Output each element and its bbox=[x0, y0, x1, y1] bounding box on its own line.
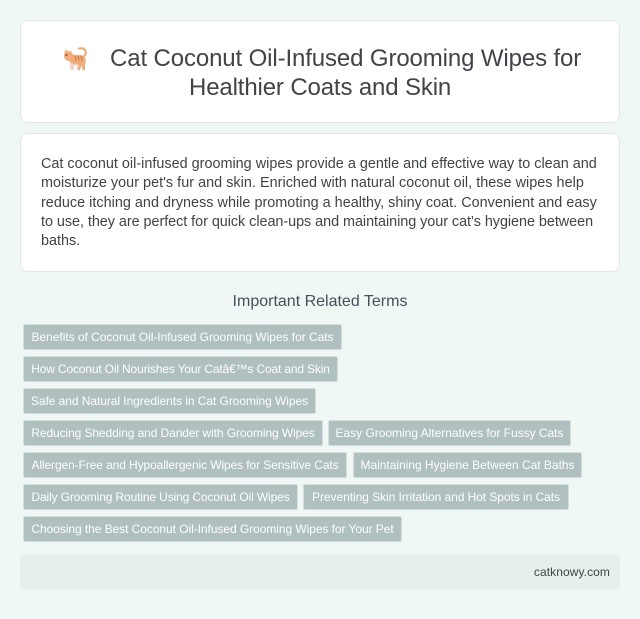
tag: Choosing the Best Coconut Oil-Infused Grooming Wipes for Your Pet bbox=[31, 522, 394, 536]
tag: Preventing Skin Irritation and Hot Spots in Cats bbox=[312, 490, 560, 504]
title line 2: Healthier Coats and Skin bbox=[189, 74, 451, 101]
description text: moisturize your pet's fur and skin. Enriched with natural coconut oil, these wipes help bbox=[41, 175, 584, 191]
tag: Benefits of Coconut Oil-Infused Grooming Wipes for Cats bbox=[32, 330, 333, 344]
tag bbox=[328, 420, 571, 446]
description text: baths. bbox=[41, 233, 80, 249]
tag bbox=[23, 516, 402, 542]
footer text: catknowy.com bbox=[534, 565, 610, 579]
icon: cat bbox=[64, 47, 87, 70]
panel: title card bbox=[20, 20, 620, 123]
title line 1: Cat Coconut Oil-Infused Grooming Wipes for bbox=[110, 45, 581, 72]
description text: reduce itching and dryness while promoting a healthy, shiny coat. Convenient and easy bbox=[41, 195, 597, 211]
tag: Daily Grooming Routine Using Coconut Oil Wipes bbox=[31, 490, 290, 504]
description text: Cat coconut oil-infused grooming wipes provide a gentle and effective way to clean and bbox=[41, 156, 597, 172]
description text bbox=[41, 156, 597, 249]
description text: to use, they are perfect for quick clean-ups and maintaining your cat's hygiene between bbox=[41, 214, 593, 230]
tag bbox=[23, 356, 338, 382]
tag bbox=[23, 452, 347, 478]
tag bbox=[23, 484, 298, 510]
tag bbox=[23, 324, 342, 350]
tag bbox=[353, 452, 582, 478]
tag bbox=[23, 420, 323, 446]
tag: Reducing Shedding and Dander with Grooming Wipes bbox=[31, 426, 315, 440]
tag bbox=[23, 388, 316, 414]
heading: related terms: Important Related Terms bbox=[233, 293, 407, 310]
tag: How Coconut Oil Nourishes Your Catâ€™s Coat and Skin bbox=[31, 362, 330, 376]
tag: Safe and Natural Ingredients in Cat Grooming Wipes bbox=[31, 394, 308, 408]
panel: tags bbox=[23, 324, 582, 542]
footer bar bbox=[20, 555, 620, 589]
tag: Maintaining Hygiene Between Cat Baths bbox=[360, 458, 575, 472]
tag: Allergen-Free and Hypoallergenic Wipes for Sensitive Cats bbox=[31, 458, 339, 472]
tag: Easy Grooming Alternatives for Fussy Cats bbox=[336, 426, 563, 440]
tag bbox=[303, 484, 569, 510]
panel: description card bbox=[20, 133, 620, 272]
